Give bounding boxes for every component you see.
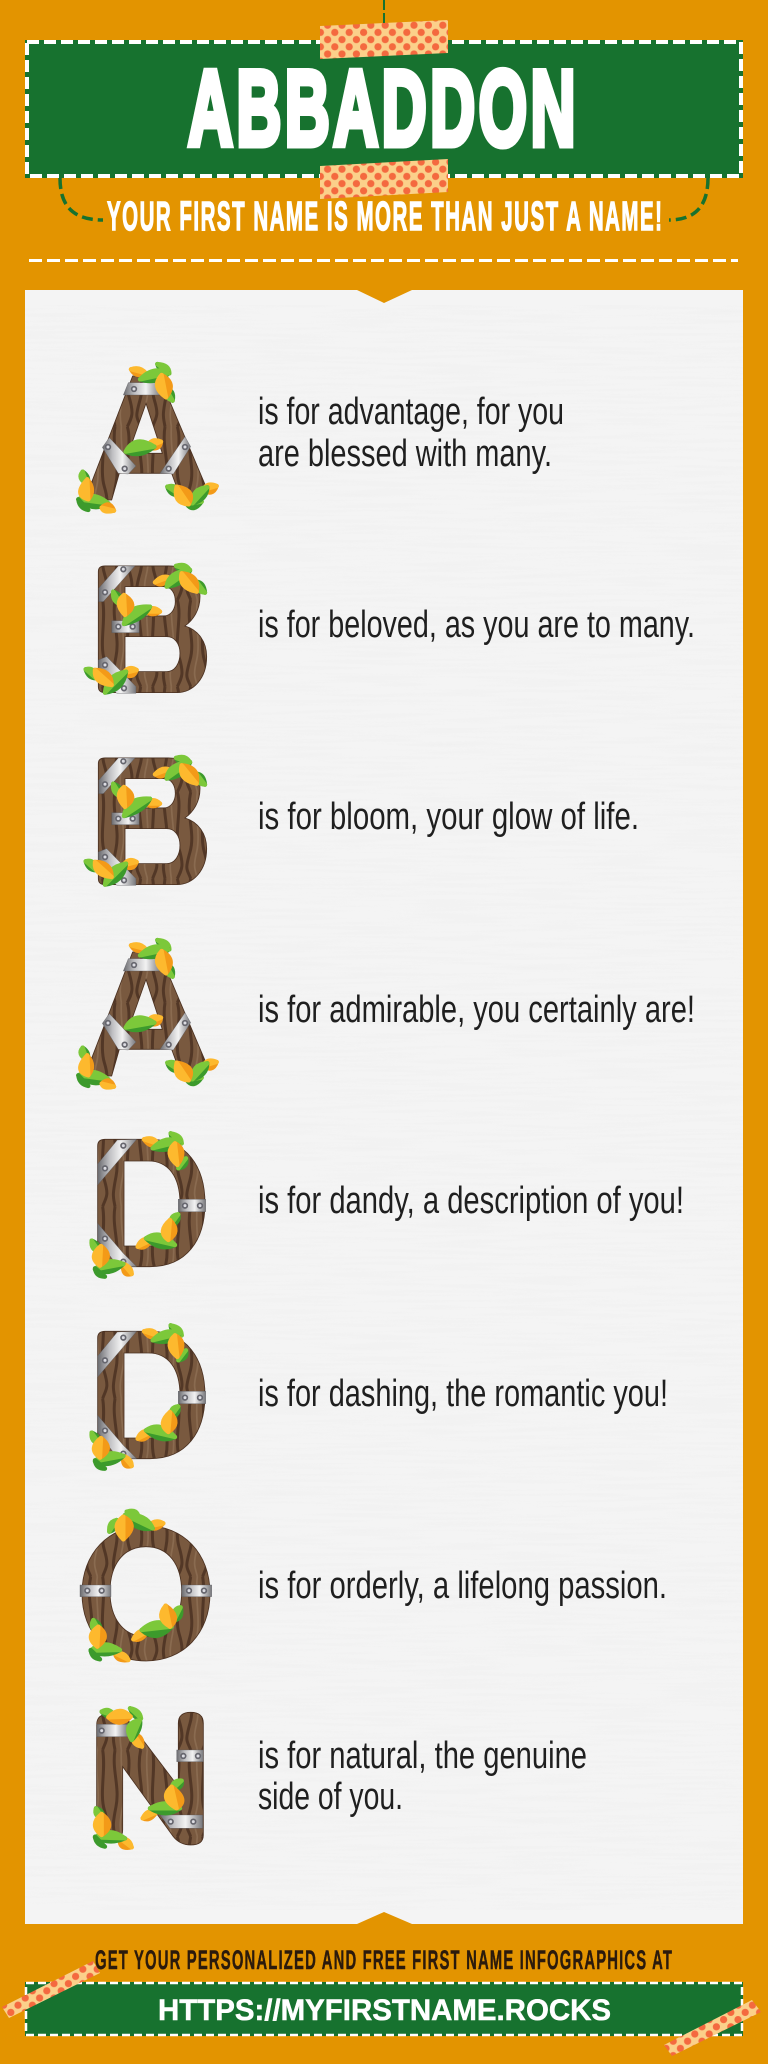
panel: letters background — [25, 290, 743, 1924]
icon: letter B — [86, 757, 207, 885]
icon: letter D — [92, 1133, 206, 1277]
text: row N natural: is for natural, the genuine — [258, 1735, 587, 1777]
footer banner — [25, 1982, 743, 2036]
tape: top — [320, 20, 448, 59]
icon: letter A — [78, 364, 217, 512]
icon: letter N — [95, 1708, 203, 1848]
tape: footer left — [2, 1961, 100, 2018]
tape: bottom — [320, 159, 448, 199]
text: row N natural: side of you. — [258, 1776, 403, 1818]
text: row A advantage: is for advantage, for you — [258, 391, 564, 433]
banner: title — [25, 40, 743, 178]
dashed connector: right — [669, 178, 708, 220]
string: top — [383, 0, 385, 24]
text: row B bloom: is for bloom, your glow of life. — [258, 796, 639, 838]
title: ABBADDON — [188, 48, 575, 168]
text: row N natural — [258, 1735, 587, 1818]
icon: letter A — [78, 940, 217, 1088]
divider — [29, 259, 738, 262]
icon: letter D — [92, 1325, 206, 1469]
footer prompt: GET YOUR PERSONALIZED AND FREE FIRST NAME INFOGRAPHICS AT — [95, 1944, 672, 1975]
icon: letter O — [80, 1511, 212, 1661]
icon: letter B — [86, 565, 207, 693]
tape: footer right — [664, 2000, 761, 2056]
subtitle: YOUR FIRST NAME IS MORE THAN JUST A NAME! — [107, 193, 662, 239]
footer URL: HTTPS://MYFIRSTNAME.ROCKS — [158, 1994, 611, 2027]
text: row A advantage — [258, 391, 564, 475]
text: row A advantage: are blessed with many. — [258, 433, 552, 475]
dashed connector: left — [60, 178, 103, 220]
